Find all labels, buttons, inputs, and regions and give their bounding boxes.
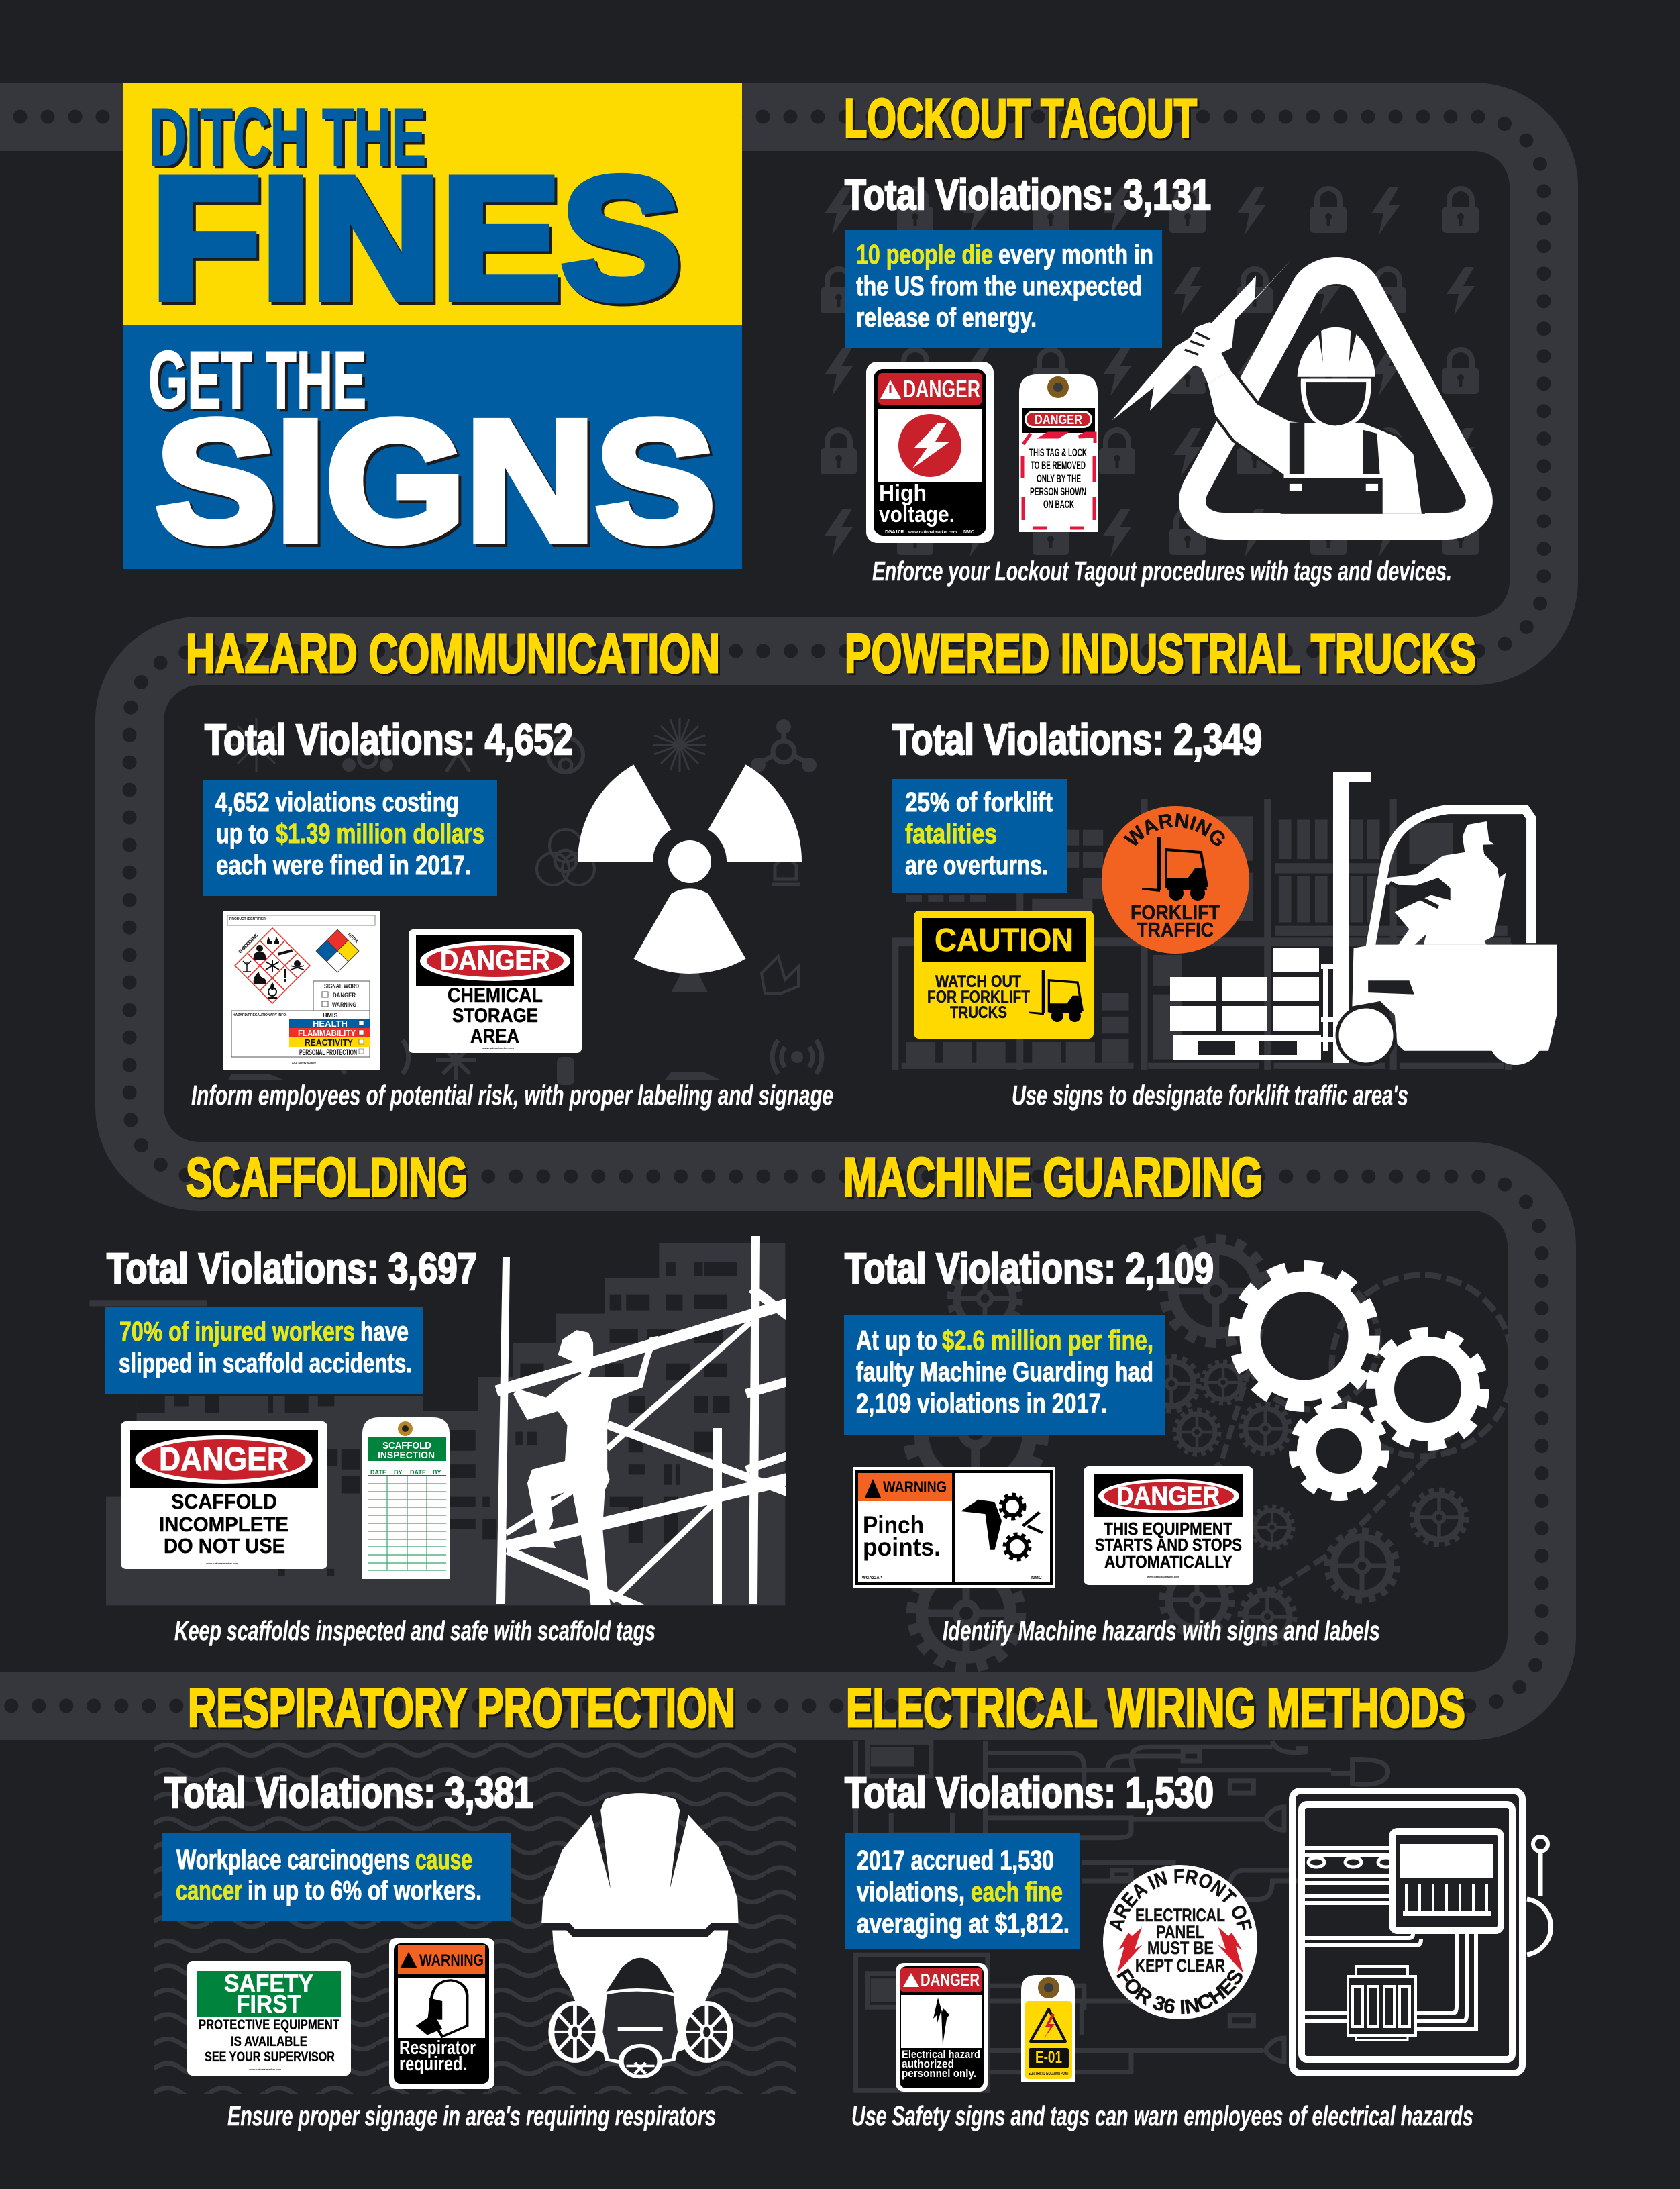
scaffold incomplete danger sign: www.nationalmarker.com <box>205 1562 239 1565</box>
GHS label <box>223 911 380 1070</box>
panel: respiratory protection <box>154 1678 796 2131</box>
pinch points warning sign: points. <box>863 1533 941 1561</box>
callout: $2.6 million per fine, <box>942 1325 1153 1356</box>
caution forklift sign: WATCH OUT <box>935 972 1021 991</box>
equipment starts and stops danger sign: STARTS AND STOPS <box>1095 1535 1242 1555</box>
safety first sign: IS AVAILABLE <box>231 2034 307 2049</box>
E-01 electrical tag: E-01 <box>1035 2048 1062 2067</box>
callout: 2017 accrued 1,530 <box>857 1845 1054 1876</box>
callout: have <box>360 1316 409 1347</box>
panel: scaffolding <box>90 1147 792 1646</box>
heading: HAZARD COMMUNICATION <box>186 623 720 684</box>
callout: every month in <box>998 239 1153 270</box>
E-01 electrical tag: ELECTRICAL ISOLATION POINT <box>1029 2072 1069 2076</box>
scaffold inspection tag <box>362 1417 450 1579</box>
caution forklift sign <box>914 911 1094 1039</box>
electrical hazard danger sign: DANGER <box>921 1970 980 1990</box>
callout: each fine <box>971 1876 1063 1907</box>
warning forklift traffic round sign: FORKLIFT <box>1131 901 1220 924</box>
heading: RESPIRATORY PROTECTION <box>188 1678 735 1739</box>
background gears <box>908 1239 1513 1668</box>
callout: 10 people die <box>856 239 993 270</box>
GHS label: NFPA <box>347 932 359 945</box>
danger lockout tag: TO BE REMOVED <box>1031 459 1086 472</box>
scaffold incomplete danger sign <box>121 1421 327 1569</box>
pinch points warning sign: Pinch <box>863 1511 924 1539</box>
danger lockout tag: ON BACK <box>1043 498 1074 511</box>
equipment starts and stops danger sign: DANGER <box>1116 1482 1220 1511</box>
caption: Use signs to designate forklift traffic area's <box>1012 1080 1408 1111</box>
background hazard icons <box>228 718 822 1085</box>
danger lockout tag: THIS TAG & LOCK <box>1029 446 1087 459</box>
heading: ELECTRICAL WIRING METHODS <box>846 1678 1465 1739</box>
panel: machine guarding <box>843 1147 1513 1668</box>
safety first sign: SAFETY <box>224 1970 313 1997</box>
GHS label: HAZARD/PRECAUTIONARY INFO. <box>233 1013 287 1017</box>
danger lockout tag: DANGER <box>1035 413 1082 427</box>
GHS label: WARNING <box>332 1001 356 1009</box>
panel: powered industrial trucks <box>845 623 1557 1111</box>
panel: electrical wiring methods <box>844 1678 1554 2131</box>
callout: up to <box>216 818 269 849</box>
high voltage danger sign: www.nationalmarker.com <box>908 531 957 535</box>
scaffold inspection tag: DATE <box>410 1469 426 1476</box>
equipment starts and stops danger sign: THIS EQUIPMENT <box>1104 1519 1232 1539</box>
respirator required warning sign: WARNING <box>419 1951 484 1970</box>
danger lockout tag: ONLY BY THE <box>1037 472 1081 485</box>
callout: 25% of forklift <box>905 786 1053 817</box>
title: signs: SIGNS <box>156 385 715 577</box>
respirator required warning sign: Respirator <box>399 2037 476 2059</box>
caption: Identify Machine hazards with signs and labels <box>943 1615 1380 1646</box>
danger lockout tag <box>1019 374 1098 532</box>
high voltage danger sign <box>866 362 994 543</box>
total violations: Total Violations: 2,349 <box>892 715 1262 764</box>
total violations: Total Violations: 1,530 <box>845 1768 1214 1817</box>
icon: three gears <box>1235 1266 1484 1496</box>
electrical hazard danger sign: Electrical hazard <box>902 2048 980 2061</box>
callout: cancer <box>176 1875 242 1906</box>
icon: forklift with pallet <box>1170 772 1557 1065</box>
callout: 4,652 violations costing <box>215 786 459 817</box>
callout: Workplace carcinogens <box>176 1844 410 1875</box>
background lock and bolt pattern <box>821 187 1479 557</box>
callout: fatalities <box>905 818 997 849</box>
scaffold incomplete danger sign: DO NOT USE <box>164 1534 285 1558</box>
background building silhouette <box>90 1243 785 1605</box>
callout <box>105 1307 423 1394</box>
warning forklift traffic round sign: WARNING <box>1123 813 1225 846</box>
pinch points warning sign: WARNING <box>883 1478 947 1496</box>
chemical storage danger sign: CHEMICAL <box>448 984 543 1007</box>
callout: each were fined in 2017. <box>216 850 471 880</box>
E-01 electrical tag <box>1021 1975 1075 2082</box>
safety first sign: SEE YOUR SUPERVISOR <box>205 2049 335 2065</box>
equipment starts and stops danger sign: www.nationalmarker.com <box>1147 1575 1180 1578</box>
heading: SCAFFOLDING <box>186 1147 468 1208</box>
icon: worker climbing scaffold <box>496 1236 792 1611</box>
caption: Keep scaffolds inspected and safe with scaffold tags <box>174 1615 655 1646</box>
total violations: Total Violations: 3,697 <box>107 1244 477 1292</box>
GHS label: ASA Safety Supply <box>292 1061 317 1064</box>
caution forklift sign: FOR FORKLIFT <box>927 988 1030 1007</box>
chemical storage danger sign <box>409 929 582 1053</box>
electrical panel keep clear round sign: PANEL <box>1156 1922 1204 1942</box>
electrical panel keep clear round sign: KEPT CLEAR <box>1135 1955 1225 1976</box>
safety first sign: FIRST <box>236 1990 301 2018</box>
electrical hazard danger sign <box>896 1963 988 2092</box>
callout: violations, <box>857 1876 965 1907</box>
pinch points warning sign: NMC <box>1031 1576 1042 1580</box>
electrical panel keep clear round sign: FOR 36 INCHES <box>1116 1968 1243 2015</box>
callout: faulty Machine Guarding had <box>856 1356 1153 1387</box>
callout <box>845 1833 1080 1949</box>
callout: are overturns. <box>905 850 1048 880</box>
warning forklift traffic round sign <box>1102 806 1249 954</box>
GHS label: HMIS <box>323 1012 338 1019</box>
background warehouse shelves <box>892 799 1512 1070</box>
high voltage danger sign: NMC <box>963 530 974 535</box>
callout <box>892 779 1067 893</box>
GHS label: DANGER <box>333 992 356 999</box>
heading: LOCKOUT TAGOUT <box>844 88 1197 149</box>
chemical storage danger sign: DANGER <box>440 944 550 976</box>
callout: $1.39 million dollars <box>276 818 484 849</box>
callout: At up to <box>856 1325 937 1356</box>
panel: lockout tagout <box>821 88 1479 587</box>
GHS label: FLAMMABILITY <box>298 1028 356 1038</box>
GHS label: GHS PICTOGRAMS <box>238 933 260 954</box>
icon: radiation trefoil <box>578 764 802 974</box>
high voltage danger sign: voltage. <box>879 502 955 527</box>
GHS label: PERSONAL PROTECTION <box>299 1048 357 1057</box>
chemical storage danger sign: www.nationalmarker.com <box>481 1046 515 1050</box>
scaffold incomplete danger sign: DANGER <box>159 1441 288 1478</box>
callout: 2,109 violations in 2017. <box>856 1388 1107 1419</box>
callout: 70% of injured workers <box>119 1316 355 1347</box>
total violations: Total Violations: 3,131 <box>845 170 1211 219</box>
equipment starts and stops danger sign: AUTOMATICALLY <box>1104 1551 1232 1572</box>
chemical storage danger sign: STORAGE <box>452 1005 538 1027</box>
total violations: Total Violations: 3,381 <box>164 1768 533 1817</box>
electrical hazard danger sign: authorized <box>902 2057 954 2070</box>
scaffold inspection tag: SCAFFOLD <box>382 1440 431 1452</box>
safety first sign: PROTECTIVE EQUIPMENT <box>199 2017 339 2033</box>
caption: Ensure proper signage in area's requiring respirators <box>227 2100 716 2131</box>
warning forklift traffic round sign: TRAFFIC <box>1137 918 1214 941</box>
danger lockout tag: PERSON SHOWN <box>1030 485 1086 498</box>
caption: Inform employees of potential risk, with proper labeling and signage <box>191 1080 833 1111</box>
scaffold inspection tag: BY <box>394 1469 403 1476</box>
chemical storage danger sign: AREA <box>470 1025 519 1048</box>
electrical panel keep clear round sign <box>1103 1865 1257 2019</box>
total violations: Total Violations: 2,109 <box>845 1244 1214 1292</box>
title: ditch the: DITCH THE <box>149 91 426 183</box>
callout: cause <box>415 1844 472 1875</box>
callout <box>845 230 1162 348</box>
title block <box>123 83 742 577</box>
GHS label: HEALTH <box>313 1019 348 1029</box>
callout <box>844 1315 1165 1435</box>
icon: helmet and respirator <box>541 1793 739 2077</box>
callout: averaging at $1,812. <box>857 1908 1069 1939</box>
icon: worker with lightning in warning triangle <box>1112 260 1479 527</box>
respirator required warning sign: required. <box>399 2053 467 2075</box>
high voltage danger sign: DGA10R <box>885 530 904 535</box>
electrical hazard danger sign: personnel only. <box>902 2067 976 2080</box>
GHS label: PRODUCT IDENTIFIER: <box>229 917 267 921</box>
callout: slipped in scaffold accidents. <box>119 1347 412 1378</box>
equipment starts and stops danger sign <box>1084 1466 1253 1585</box>
GHS label: SIGNAL WORD <box>324 983 359 990</box>
background circuit lines <box>856 1741 1387 2090</box>
safety first sign: www.nationalmarker.com <box>248 2068 282 2071</box>
callout <box>203 780 497 896</box>
title: fines: FINES <box>151 141 681 335</box>
scaffold inspection tag: BY <box>433 1469 441 1476</box>
respirator required warning sign <box>389 1938 494 2089</box>
title: get the: GET THE <box>148 334 366 425</box>
scaffold incomplete danger sign: SCAFFOLD <box>171 1490 277 1513</box>
high voltage danger sign: DANGER <box>903 375 980 403</box>
high voltage danger sign: High <box>879 480 927 506</box>
callout <box>162 1833 511 1921</box>
callout: the US from the unexpected <box>856 270 1142 301</box>
icon: electrical panel <box>1292 1791 1551 2073</box>
scaffold inspection tag: DATE <box>370 1469 386 1476</box>
electrical panel keep clear round sign: AREA IN FRONT OF <box>1110 1868 1252 1932</box>
caution forklift sign: TRUCKS <box>950 1003 1007 1022</box>
callout: release of energy. <box>856 302 1037 333</box>
safety first sign <box>187 1961 351 2076</box>
electrical panel keep clear round sign: ELECTRICAL <box>1135 1905 1225 1925</box>
scaffold inspection tag: INSPECTION <box>378 1449 435 1461</box>
pinch points warning sign: WGA32AP <box>862 1576 882 1580</box>
conveyor track <box>0 117 1544 1706</box>
GHS label: REACTIVITY <box>305 1037 353 1048</box>
heading: MACHINE GUARDING <box>843 1147 1263 1208</box>
electrical panel keep clear round sign: MUST BE <box>1147 1938 1214 1958</box>
scaffold incomplete danger sign: INCOMPLETE <box>159 1513 288 1536</box>
callout: in up to 6% of workers. <box>248 1875 482 1906</box>
pinch points warning sign <box>853 1467 1055 1588</box>
total violations: Total Violations: 4,652 <box>205 715 573 764</box>
caution forklift sign: CAUTION <box>935 923 1073 958</box>
panel: hazard communication <box>186 623 833 1111</box>
background wave pattern <box>154 1742 796 2094</box>
